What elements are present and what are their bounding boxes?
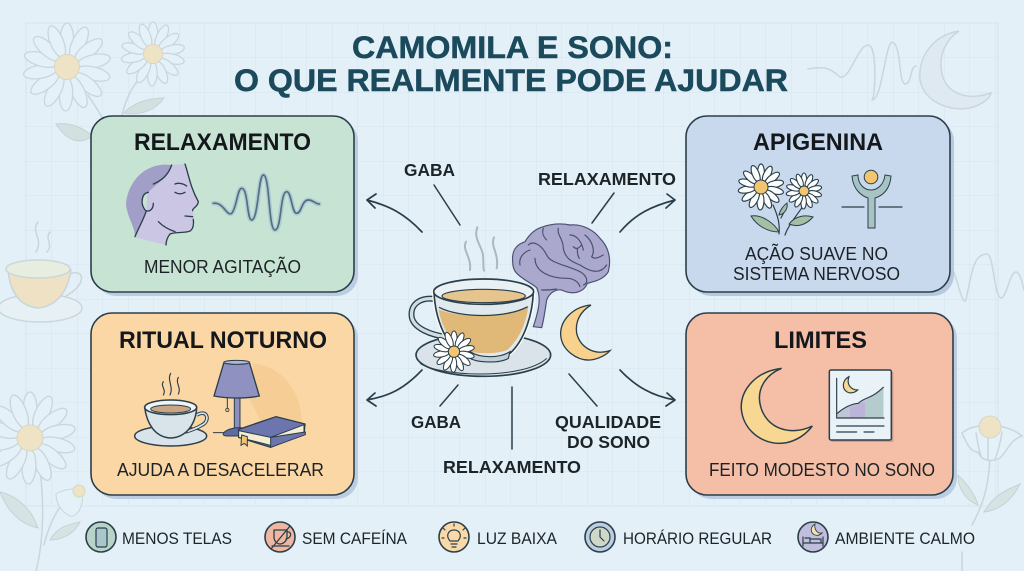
icon: tea cup: [135, 373, 207, 446]
decorative moon and wave top right: [808, 31, 991, 109]
panel: relaxamento: [91, 116, 358, 296]
icon: lamp and book: [213, 360, 305, 447]
decorative chamomile bottom right: [958, 416, 1022, 571]
label: gaba top: [404, 160, 460, 225]
legend: ambiente calmo: AMBIENTE CALMO: [835, 530, 975, 548]
icon: brain wave: [213, 175, 319, 230]
legend: horário regular: [585, 522, 772, 552]
caption: ajuda a desacelerar: AJUDA A DESACELERAR: [117, 460, 324, 480]
icon: sleeping face: [126, 164, 198, 245]
label: gaba bottom: [411, 385, 461, 432]
label: qualidade do sono: QUALIDADE: [555, 412, 661, 432]
icon: receptor: [842, 170, 902, 228]
legend: menos telas: MENOS TELAS: [122, 530, 232, 548]
legend: luz baixa: LUZ BAIXA: [477, 530, 557, 548]
title: [234, 29, 788, 98]
panel: ritual noturno: [91, 313, 358, 499]
label: qualidade do sono: DO SONO: [567, 432, 650, 452]
legend: menos telas: [86, 522, 232, 552]
arrow: to ritual noturno: [367, 370, 422, 406]
decorative chamomile top left: [23, 22, 185, 141]
panel: apigenina: [686, 116, 954, 296]
icon: sleep chart document: [829, 370, 893, 442]
label: relaxamento bottom: [443, 387, 581, 477]
title: CAMOMILA E SONO:: [352, 29, 673, 65]
decorative tea cup left: [0, 222, 82, 322]
title: O QUE REALMENTE PODE AJUDAR: [234, 62, 788, 98]
arrow: to apigenina: [620, 194, 675, 232]
heading: ritual noturno: RITUAL NOTURNO: [119, 327, 327, 354]
caption: feito modesto no sono: FEITO MODESTO NO SONO: [709, 460, 935, 480]
label: relaxamento bottom: RELAXAMENTO: [443, 457, 581, 477]
icon: crescent moon: [741, 368, 812, 443]
legend: sem cafeína: [265, 522, 407, 552]
caption: ação suave no sistema nervoso: SISTEMA NERVOSO: [733, 264, 900, 284]
decorative chamomile bottom left: [0, 392, 85, 571]
label: gaba bottom: GABA: [411, 412, 461, 432]
legend: horário regular: HORÁRIO REGULAR: [623, 529, 772, 548]
heading: limites: LIMITES: [774, 327, 867, 354]
heading: relaxamento: RELAXAMENTO: [134, 129, 311, 156]
decorative wave right: [952, 254, 1024, 301]
legend: sem cafeína: SEM CAFEÍNA: [302, 529, 407, 548]
arrow: to relaxamento: [367, 194, 422, 232]
icon: steam: [465, 227, 497, 271]
label: gaba top: GABA: [404, 160, 455, 180]
legend: ambiente calmo: [798, 522, 975, 552]
icon: small moon: [561, 305, 610, 360]
heading: apigenina: APIGENINA: [753, 129, 883, 156]
arrow: to limites: [620, 370, 675, 406]
icon: chamomile flowers: [738, 164, 822, 235]
icon: chamomile tea cup: [411, 279, 551, 376]
label: qualidade do sono: [555, 374, 661, 452]
caption: menor agitação: MENOR AGITAÇÃO: [144, 256, 301, 277]
label: relaxamento top: [538, 169, 676, 223]
label: relaxamento top: RELAXAMENTO: [538, 169, 676, 189]
panel: limites: [686, 313, 957, 499]
legend: luz baixa: [439, 522, 557, 552]
icon: brain: [512, 224, 610, 328]
caption: ação suave no sistema nervoso: AÇÃO SUAVE NO: [745, 243, 888, 264]
caption: ação suave no sistema nervoso: [733, 243, 900, 284]
